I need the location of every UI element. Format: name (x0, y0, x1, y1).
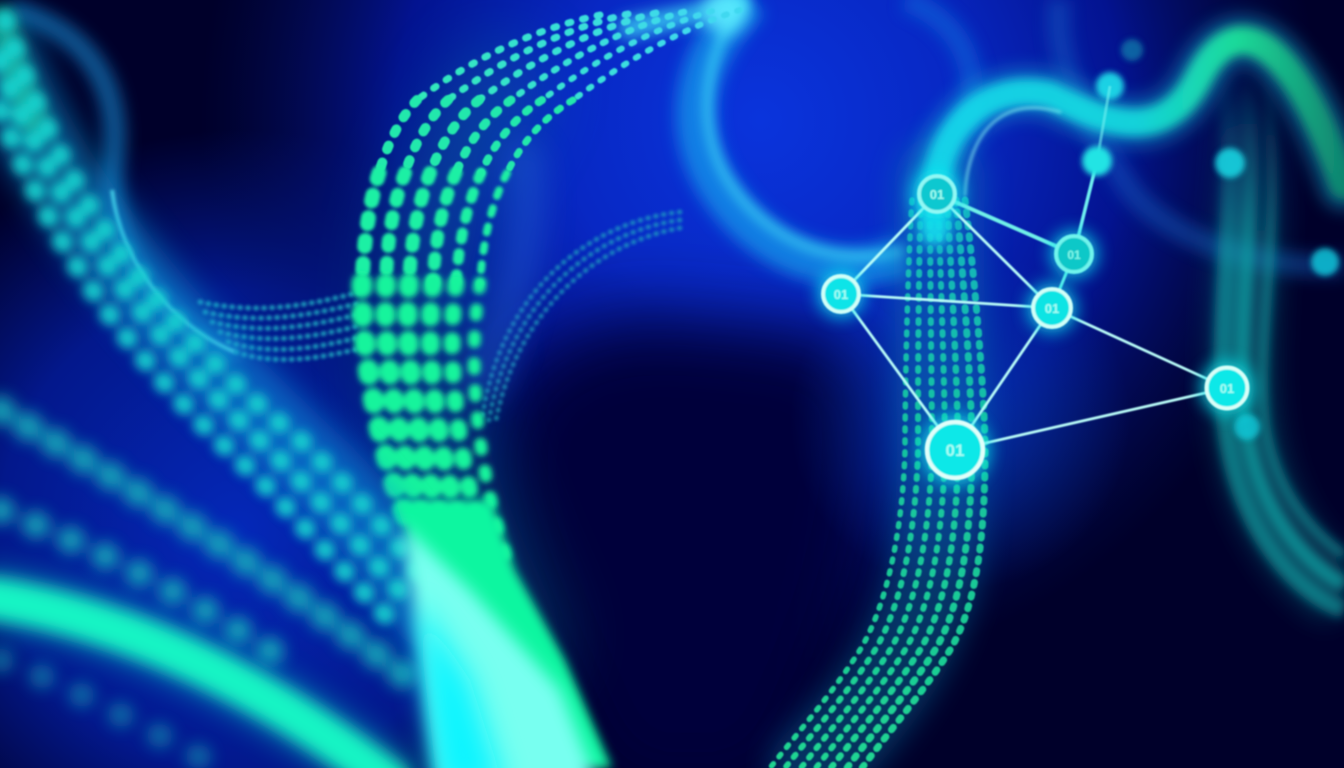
lower dots (362, 283, 510, 570)
lower middle dots (362, 173, 507, 283)
network links (841, 86, 1227, 450)
ribbon: bright green swoosh lower left (0, 596, 400, 768)
node 3: 01 (1045, 301, 1059, 316)
node 2 (823, 276, 859, 312)
ribbon: top right cyan wave (934, 40, 1344, 230)
node 2: 01 (834, 287, 848, 302)
network diagram (817, 86, 1254, 485)
node 4: 01 (1067, 248, 1081, 262)
node 7 (1082, 146, 1112, 176)
node 6: 01 (946, 441, 964, 460)
node 1 (919, 176, 955, 212)
upper middle dots (379, 100, 573, 173)
node 5: 01 (1220, 381, 1234, 396)
ribbon: blurred binary bands lower left (0, 410, 410, 768)
ribbon: small binary loop left (200, 292, 366, 359)
node glows (817, 169, 1254, 485)
node 5 (1206, 368, 1248, 408)
ribbon: inner binary arc (482, 212, 680, 420)
node 6 (927, 422, 983, 478)
node 4 (1056, 236, 1092, 272)
node 3 (1033, 289, 1071, 327)
ribbon: thin left cyan curve (10, 10, 240, 355)
blurred nodes right (1096, 39, 1339, 440)
ribbon: main green binary strand (362, 10, 740, 640)
ribbon: blue swoosh behind network (620, 0, 1344, 266)
node 1: 01 (930, 187, 944, 202)
ribbon: right green binary strand (770, 180, 985, 768)
ribbon: bright cyan junction (395, 500, 612, 768)
ribbon: right vertical teal strand (1223, 70, 1344, 610)
ribbon: large blurred left strand (0, 20, 430, 630)
top dots (417, 10, 740, 100)
